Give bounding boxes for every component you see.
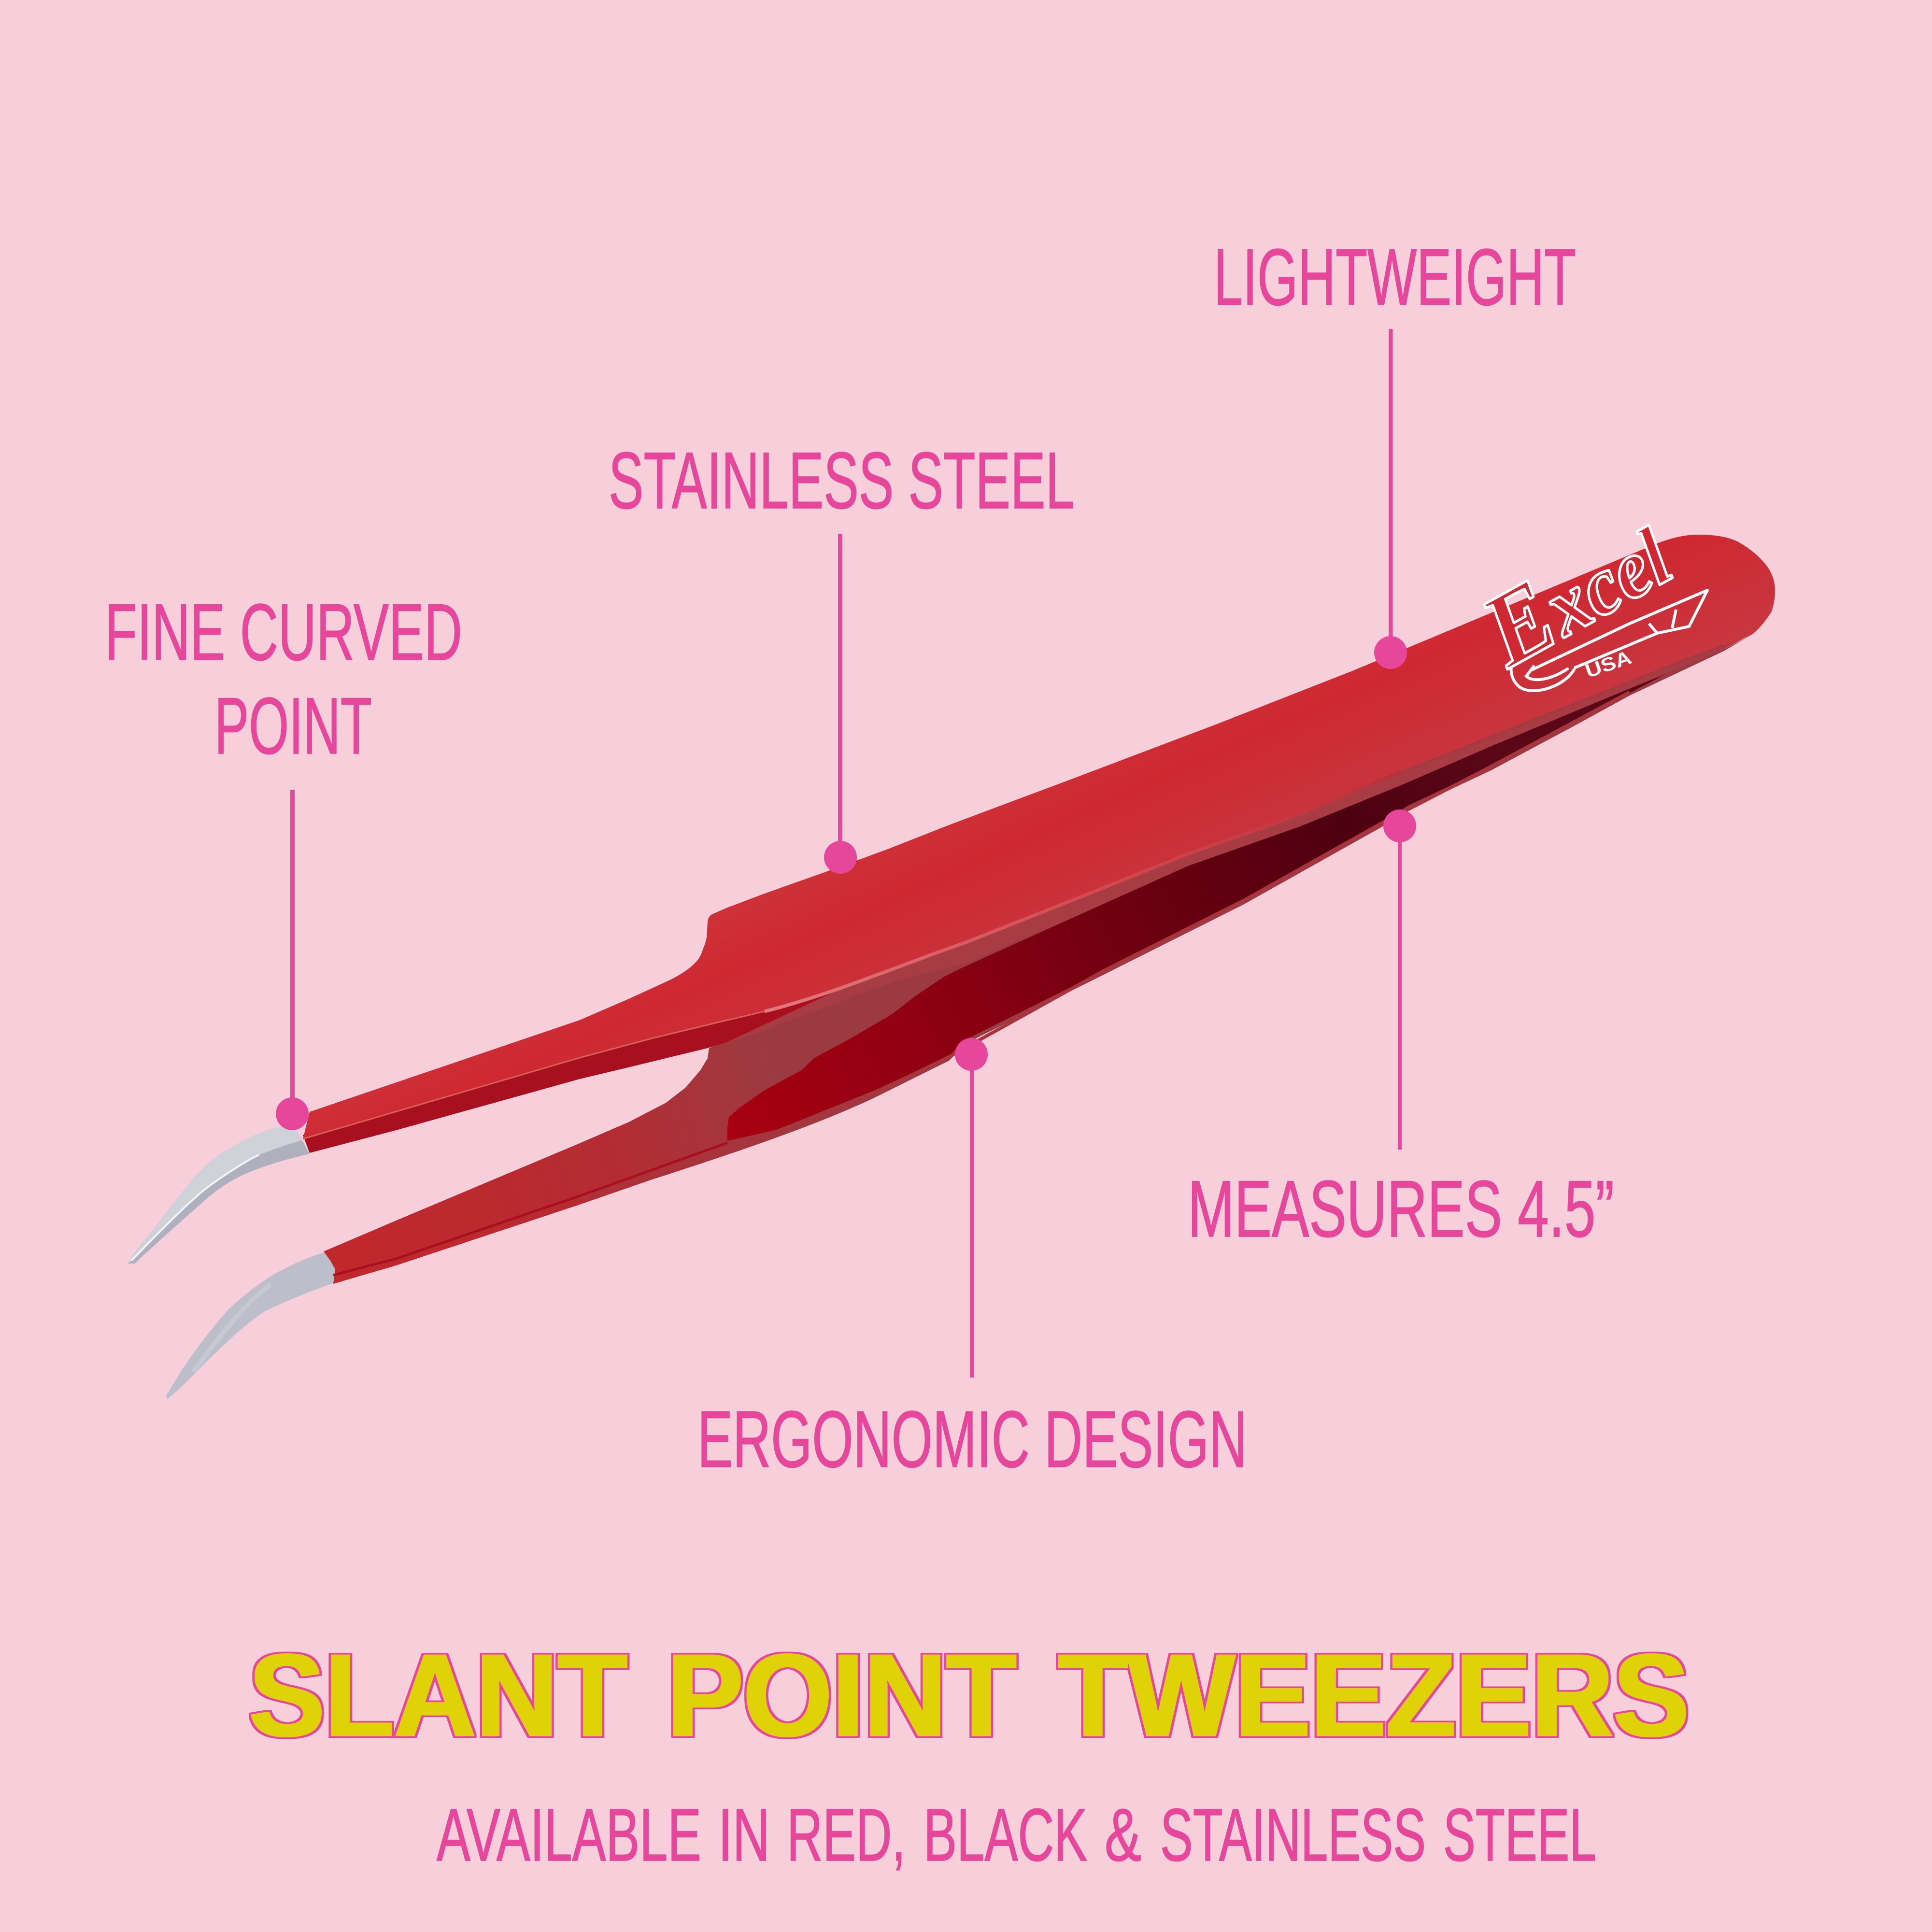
- label: fine curved point: [105, 588, 462, 771]
- subtitle: STEEL: [1443, 1793, 1596, 1876]
- title: TWEEZERS: [1058, 1629, 1689, 1761]
- USA text: USA: [1583, 647, 1634, 682]
- subtitle: IN: [718, 1793, 770, 1876]
- subtitle: &: [1105, 1793, 1141, 1876]
- knife mark: [1530, 590, 1707, 671]
- subtitle: AVAILABLE: [437, 1793, 701, 1876]
- title: POINT: [667, 1629, 1016, 1761]
- label: lightweight: LIGHTWEIGHT: [1214, 233, 1576, 322]
- label: fine curved point: POINT: [214, 682, 372, 771]
- callout: ergonomic design: [697, 1038, 1247, 1484]
- label: ergonomic design: ERGONOMIC DESIGN: [697, 1395, 1247, 1484]
- callout: measures 4.5 inches: [1188, 810, 1614, 1254]
- callout: fine curved point: [105, 588, 462, 1130]
- icon: Excel USA logo: [1462, 494, 1707, 691]
- label: measures: MEASURES 4.5”: [1188, 1165, 1614, 1254]
- subtitle: BLACK: [923, 1793, 1087, 1876]
- tweezers photo illustration: [128, 494, 1775, 1399]
- logo swash: [1511, 650, 1574, 691]
- upper curved steel tip: [128, 1127, 310, 1264]
- subtitle: RED,: [787, 1793, 906, 1876]
- upper arm of tweezers: [128, 535, 1775, 1264]
- title: SLANT: [249, 1629, 627, 1761]
- subtitle: STAINLESS: [1160, 1793, 1426, 1876]
- callout: lightweight: [1214, 233, 1576, 669]
- lower arm of tweezers: [166, 635, 1752, 1399]
- label: fine curved point: FINE CURVED: [105, 588, 462, 677]
- Excel script lettering: Excel: [1462, 494, 1688, 689]
- callout: stainless steel: [609, 436, 1075, 874]
- label: stainless steel: STAINLESS STEEL: [609, 436, 1075, 526]
